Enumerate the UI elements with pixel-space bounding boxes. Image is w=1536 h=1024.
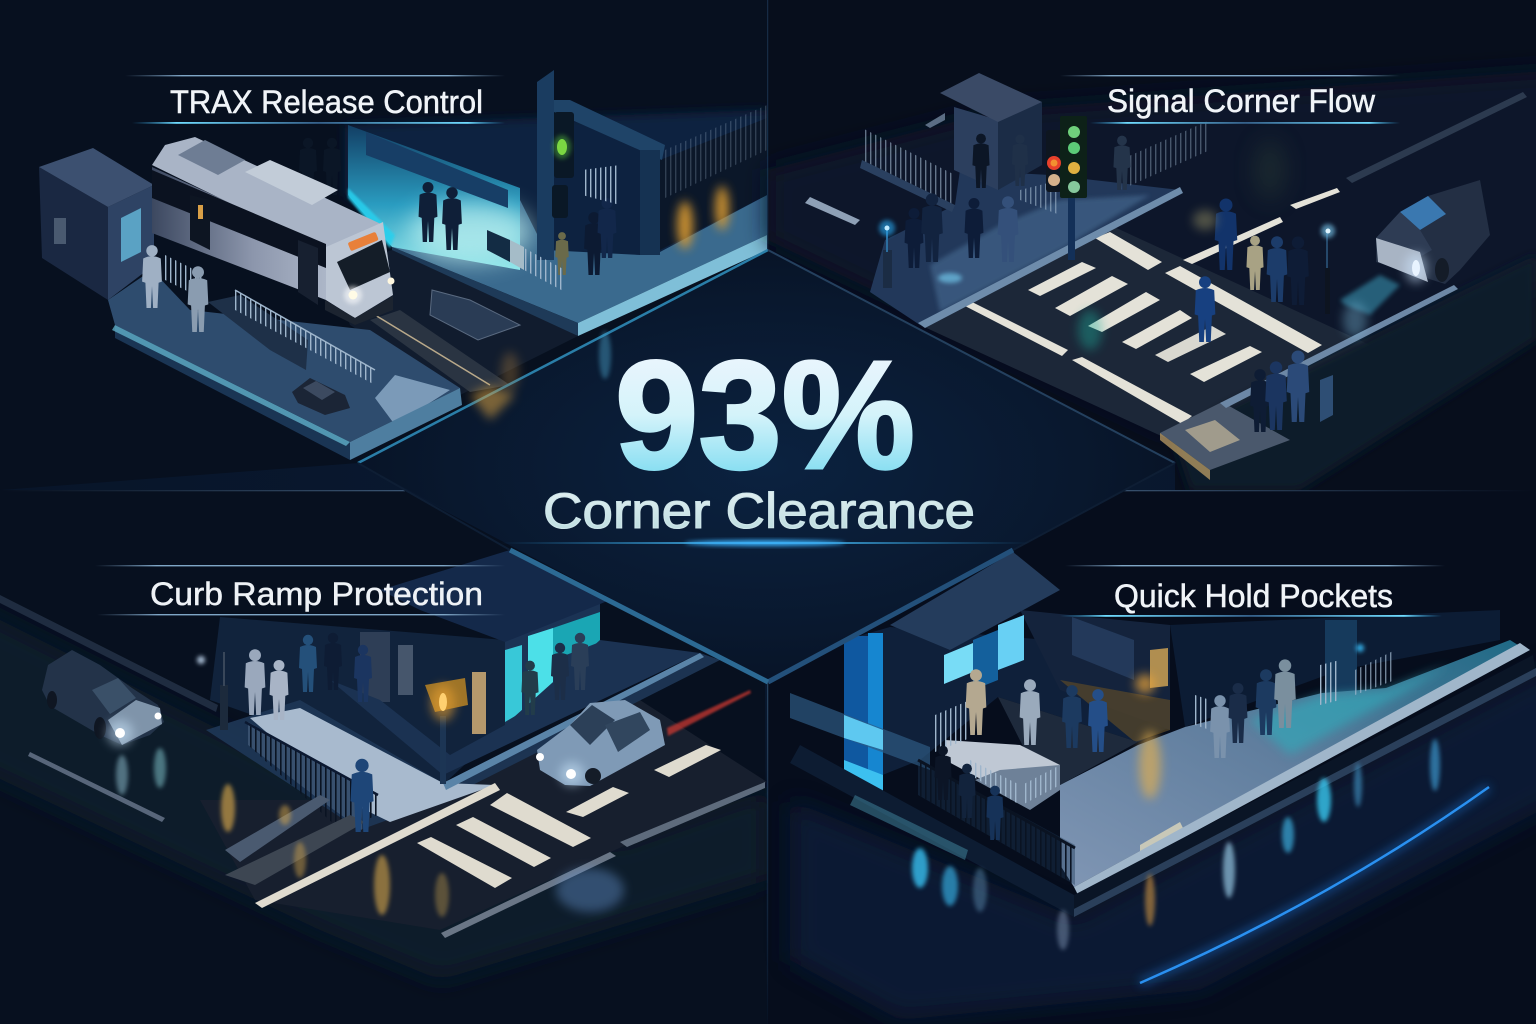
upper platform — [345, 105, 767, 336]
panel heading: Curb Ramp Protection — [150, 576, 483, 612]
lower corner curb — [1160, 255, 1536, 490]
panel heading: TRAX Release Control — [170, 84, 483, 120]
tram — [152, 137, 394, 325]
person at ramp — [350, 759, 374, 832]
pedestrians in crosswalk — [1195, 198, 1309, 342]
panel heading: Quick Hold Pockets — [1114, 578, 1393, 614]
station building — [39, 148, 154, 300]
ground — [0, 490, 767, 1024]
building — [210, 550, 610, 783]
reflections — [470, 331, 611, 420]
plaza floor — [206, 640, 720, 830]
ground — [768, 490, 1536, 1024]
queue railing — [1195, 644, 1395, 730]
fare gates — [487, 165, 620, 292]
diamond edges — [358, 250, 1175, 682]
blue arc — [1140, 787, 1489, 983]
traffic signal — [1046, 116, 1087, 260]
commuters behind tram — [299, 138, 341, 195]
pedestrians at corner — [905, 134, 1131, 268]
corner sidewalk — [860, 160, 1183, 328]
lower platform — [108, 270, 462, 460]
railing — [862, 120, 1210, 215]
blue light pillars — [790, 633, 930, 795]
glow rule — [500, 540, 1030, 546]
van — [1340, 180, 1490, 315]
asphalt ground — [0, 0, 767, 490]
traffic signal gantry — [537, 70, 665, 260]
street lamps — [197, 652, 455, 784]
red tail streak — [667, 690, 751, 736]
centre diamond panel — [358, 250, 1175, 682]
stat label: Corner Clearance — [543, 483, 975, 539]
tactile mat — [225, 815, 365, 885]
tram track road — [330, 250, 578, 395]
parked car — [292, 378, 350, 415]
wet reflections — [912, 739, 1440, 950]
crosswalk stripes — [805, 92, 1527, 424]
crossing surface — [920, 225, 1370, 440]
waiting group — [1250, 350, 1309, 432]
panel: Quick Hold Pockets — [768, 490, 1536, 1024]
pavement — [998, 640, 1518, 887]
asphalt — [768, 0, 1536, 490]
panel: Curb Ramp Protection — [0, 490, 767, 1024]
crossing and lines — [0, 595, 765, 938]
road reflections — [116, 748, 624, 917]
waiting queue — [1210, 659, 1296, 758]
platform with railings — [918, 700, 1075, 885]
standing group — [245, 633, 589, 720]
panel: TRAX Release Control — [0, 0, 767, 490]
big stat: 93% — [615, 329, 915, 501]
curb edge — [790, 643, 1536, 917]
bollard lights — [879, 220, 1335, 314]
ramp railing — [245, 722, 378, 830]
panel: Signal Corner Flow — [768, 0, 1536, 490]
people on platform — [934, 669, 1108, 840]
commuters — [142, 182, 616, 332]
car — [536, 700, 665, 786]
panel heading: Signal Corner Flow — [1107, 83, 1376, 119]
building — [845, 552, 1500, 790]
wet road glints — [1078, 140, 1284, 350]
diamond background — [358, 250, 1175, 682]
guard booth — [925, 73, 1042, 190]
van — [42, 650, 164, 746]
shelter bench and railing — [165, 255, 375, 385]
